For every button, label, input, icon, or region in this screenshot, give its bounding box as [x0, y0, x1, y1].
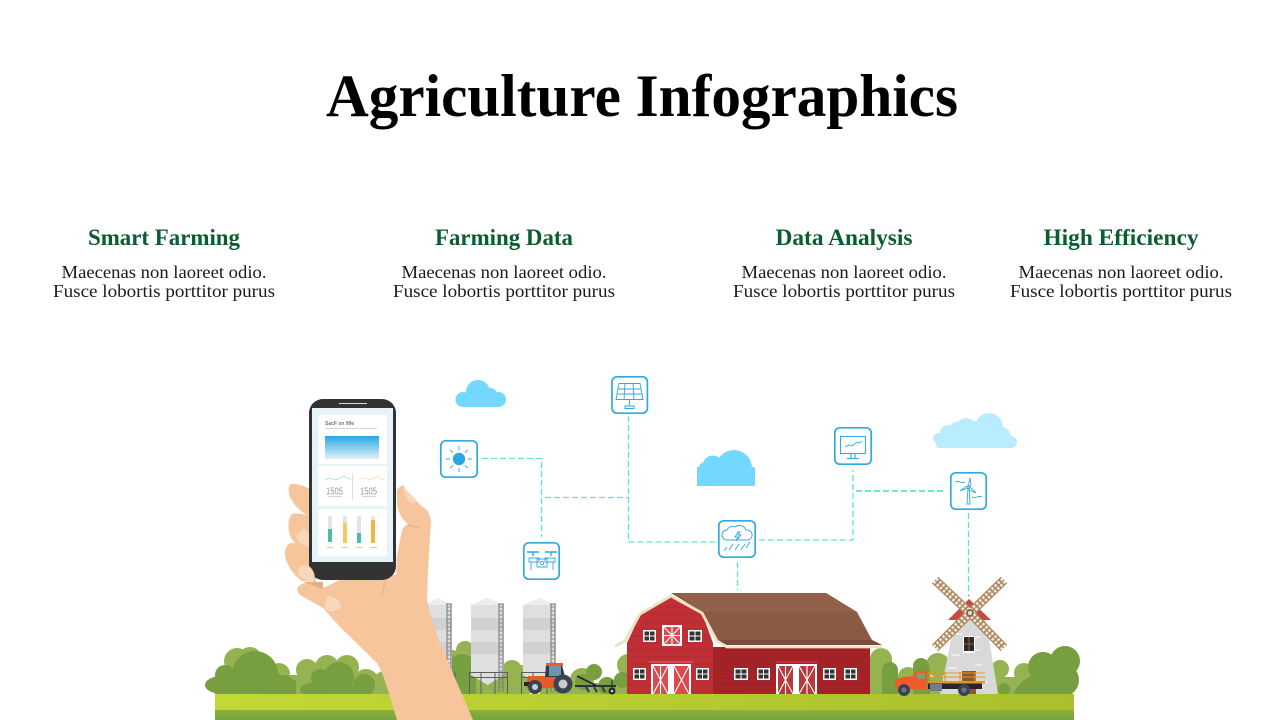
text block: High Efficiency: Fusce lobortis porttitor purus — [1010, 281, 1232, 301]
phone card: bars — [318, 509, 387, 556]
barn loft window — [662, 625, 682, 646]
text block: Farming Data: Maecenas non laoreet odio. — [402, 262, 606, 282]
icon: monitor chart — [835, 428, 871, 464]
silos — [424, 598, 560, 694]
text block: High Efficiency: Maecenas non laoreet odio. — [1018, 262, 1224, 282]
barn windows — [633, 630, 857, 680]
ground — [215, 694, 1074, 720]
windmill — [935, 580, 1004, 694]
icon: flat-bottom cloud — [697, 450, 755, 486]
windmill window — [963, 636, 975, 653]
text block: High Efficiency — [1010, 225, 1232, 301]
phone in hand — [285, 399, 473, 720]
icon: storm cloud — [719, 521, 755, 557]
phone card: numbers: 1505 — [360, 486, 377, 498]
windmill tower — [940, 620, 998, 694]
phone — [309, 399, 396, 580]
barn side wall — [713, 647, 870, 694]
hand palm and thumb — [297, 485, 473, 720]
hand back fingers — [285, 484, 316, 582]
barn side doors — [775, 661, 818, 694]
thumb nail — [403, 487, 417, 503]
connector lines — [482, 416, 968, 597]
text block: Data Analysis — [733, 225, 955, 301]
icon: solar panel — [612, 377, 647, 413]
text block: Data Analysis: Maecenas non laoreet odio. — [742, 262, 946, 282]
phone card: map: SacF on 99e — [325, 421, 354, 427]
phone card: numbers — [318, 466, 387, 506]
text block: Farming Data: Fusce lobortis porttitor purus — [393, 281, 615, 301]
tractor — [524, 663, 616, 694]
barn roof trim — [615, 596, 882, 647]
title: Agriculture Infographics — [326, 63, 958, 129]
icon: pale cloud — [933, 413, 1017, 448]
text block: Data Analysis: Data Analysis — [776, 225, 913, 250]
text block: Smart Farming — [53, 225, 275, 301]
icon: sun — [441, 441, 477, 477]
windmill roof — [948, 599, 991, 620]
barn plank lines — [627, 607, 870, 685]
text block: High Efficiency: High Efficiency — [1044, 225, 1199, 250]
text block: Smart Farming: Smart Farming — [88, 225, 240, 250]
icon: drone — [524, 543, 559, 579]
trees: right of barn and windmill — [870, 646, 1080, 697]
phone card: numbers: 1505 — [326, 486, 343, 498]
barn front doors — [649, 661, 693, 694]
text block: Data Analysis: Fusce lobortis porttitor purus — [733, 281, 955, 301]
text block: Farming Data — [393, 225, 615, 301]
barn front wall — [627, 597, 713, 694]
finger shadow — [303, 582, 323, 589]
barn roof — [671, 593, 882, 645]
hand creases — [382, 525, 420, 597]
trees: behind silos — [440, 641, 639, 696]
text block: Smart Farming: Fusce lobortis porttitor purus — [53, 281, 275, 301]
text block: Smart Farming: Maecenas non laoreet odio. — [62, 262, 266, 282]
trees: left bushes — [205, 647, 420, 701]
windmill sails — [935, 580, 1004, 648]
truck — [895, 671, 985, 696]
finger nails — [296, 529, 341, 611]
icon: small cloud — [456, 380, 506, 407]
barn — [615, 593, 882, 694]
icon: wind turbine — [951, 473, 986, 509]
text block: Farming Data: Farming Data — [435, 225, 573, 250]
windmill door — [962, 671, 976, 694]
phone card: map — [318, 415, 387, 464]
